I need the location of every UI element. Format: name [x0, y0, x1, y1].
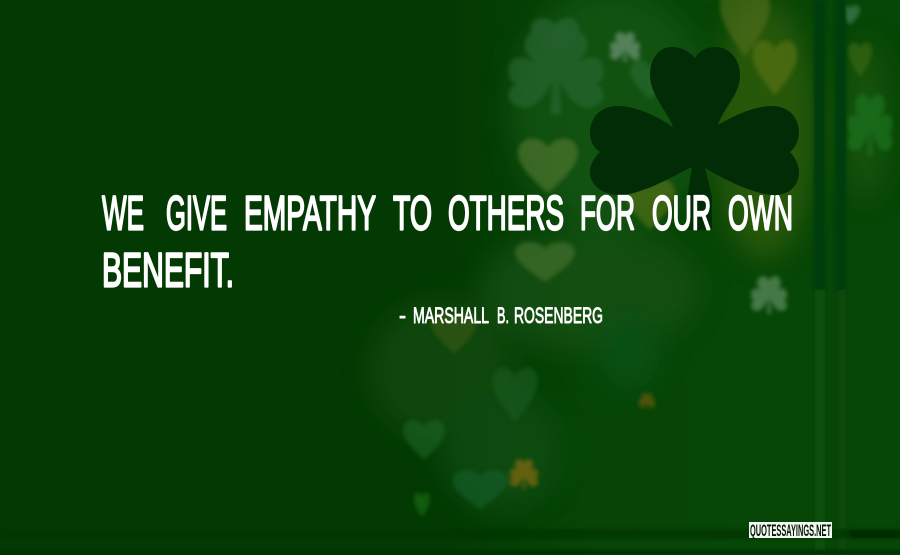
- quote text: OWN: [728, 188, 793, 240]
- quote text: WE: [102, 188, 144, 240]
- background glows: [370, 0, 885, 510]
- attribution: B.: [497, 303, 509, 328]
- watermark: [749, 521, 832, 540]
- quote text: FOR: [580, 188, 635, 240]
- icon: dark shamrock: [590, 47, 799, 230]
- quote text: EMPATHY: [244, 188, 376, 240]
- quote text: TO: [393, 188, 432, 240]
- quote text: OTHERS: [448, 188, 564, 240]
- attribution: -: [399, 303, 406, 328]
- background shamrocks: [403, 0, 892, 518]
- attribution: MARSHALL: [413, 303, 489, 328]
- bottom band: [0, 529, 900, 555]
- attribution: [399, 303, 603, 328]
- vertical stripes: [814, 0, 846, 555]
- quote text: BENEFIT.: [102, 244, 234, 298]
- quote text: OUR: [652, 188, 711, 240]
- attribution: ROSENBERG: [514, 303, 603, 328]
- quote text: GIVE: [166, 188, 227, 240]
- quote text: [102, 188, 793, 298]
